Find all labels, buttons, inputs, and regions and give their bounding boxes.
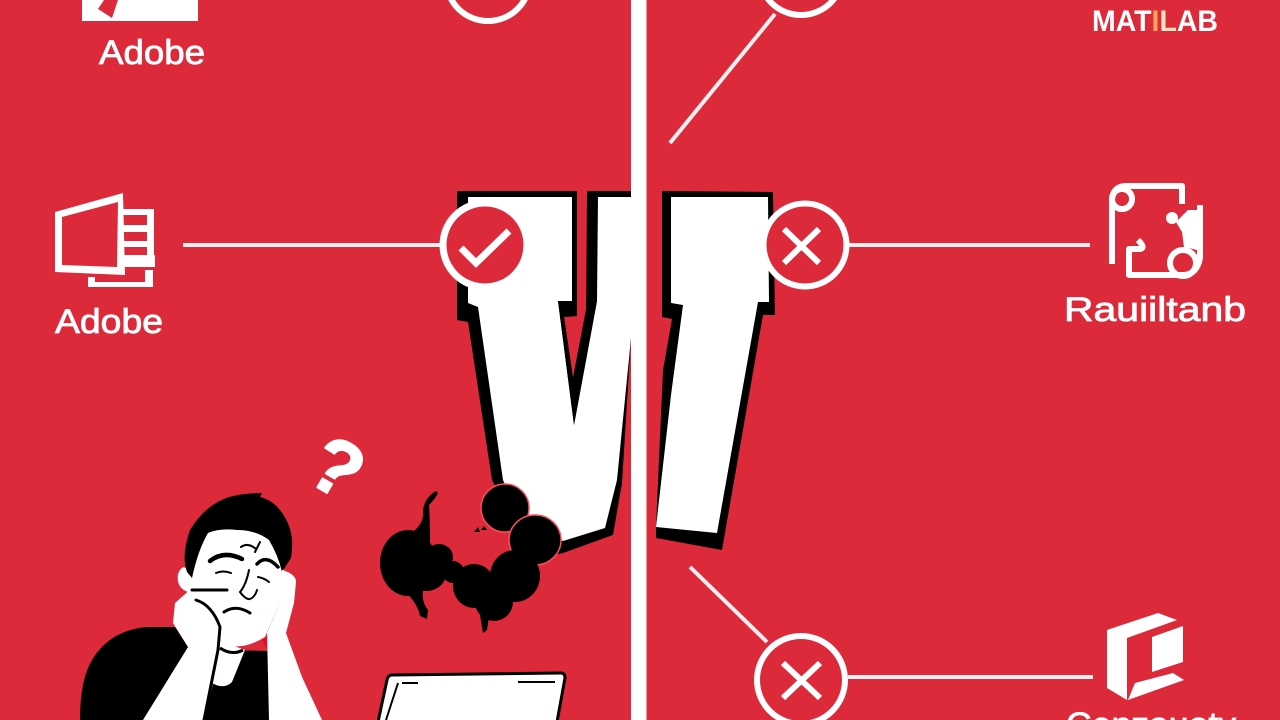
label: matlab: MATILAB [1092,5,1218,38]
face [178,528,284,646]
connector lines [183,14,1093,677]
top left check circle [446,0,530,21]
icon: book [1107,613,1184,700]
icon: top adobe box [82,0,198,21]
hair [185,493,292,578]
top right cross circle [759,0,843,15]
face features [210,542,278,613]
check circle [443,203,527,287]
cross circle [764,204,846,286]
icon: puzzle [1112,186,1200,276]
smoke cloud [380,484,561,633]
large letter V left half [457,191,631,560]
label: adobe: Adobe [55,303,163,341]
label: rauiiltanb: Rauiiltanb [1064,291,1246,329]
large letter V right half [656,191,775,550]
icon: window adobe [55,193,155,287]
right hand [267,570,322,720]
question mark: ? [294,418,380,518]
neck [212,640,245,686]
laptop [378,673,565,720]
bottom cross circle [757,636,845,720]
center divider [631,0,646,720]
left hand and arm [143,588,220,720]
shirt [80,627,190,720]
label: top adobe: Adobe [99,34,205,72]
person [80,493,322,720]
